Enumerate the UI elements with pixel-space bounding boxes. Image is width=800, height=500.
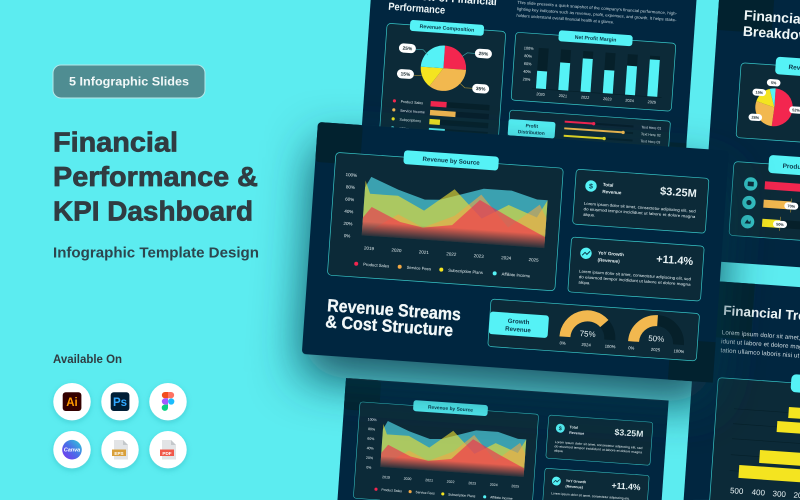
pill: trends <box>790 374 800 400</box>
icon: Adobe Photoshop: Ps <box>113 397 127 409</box>
panel: total revenue: aliqua. <box>554 449 564 453</box>
panel: total revenue: $ <box>559 426 562 432</box>
pie chart: 25% <box>478 51 489 58</box>
panel: yoy growth: YoY Growth <box>566 479 586 484</box>
axis labels: 100% <box>345 172 357 178</box>
legend: Subscription Plans <box>448 492 476 498</box>
legend: Subscription Plans <box>448 268 483 275</box>
axis labels: 2024 <box>501 255 512 261</box>
panel: revenue composition <box>379 18 506 146</box>
gauge: 2024: 2024 <box>581 342 592 348</box>
axis labels: 2025 <box>528 257 539 263</box>
slide: revenue streams (main) <box>302 122 729 383</box>
bar chart: net profit margin: 2023 <box>603 97 612 102</box>
axis labels: 20% <box>343 221 353 226</box>
axis labels: 2022 <box>446 251 457 257</box>
panel: total revenue <box>546 415 653 465</box>
panel: yoy growth: (Revenue) <box>565 484 584 490</box>
pill: growth revenue: Growth <box>507 318 530 326</box>
panel: total revenue: do eiusmod tempor incididunt ut labore et dolore magna <box>554 444 643 454</box>
legend and bars <box>391 98 490 137</box>
badge: 5 infographic slides: 5 Infographic Slides <box>69 74 189 88</box>
gauge: 2025: 2025 <box>651 347 661 352</box>
pie chart: 5% <box>771 81 777 85</box>
gauge: 2025: 50% <box>648 334 665 344</box>
panel: total revenue: Revenue <box>569 431 584 436</box>
bar chart: net profit margin: 80% <box>524 54 533 59</box>
bars: product rows <box>762 181 800 238</box>
pill: revenue composition: Revenue Composition <box>419 24 474 34</box>
legend: Service Fees <box>407 265 431 271</box>
gauge: 2024: 0% <box>559 340 566 346</box>
slide: financial overview (top) <box>359 0 698 183</box>
yoy growth label: (Revenue) <box>597 257 620 264</box>
panel: yoy growth: +11.4% <box>611 480 641 492</box>
legend and bars: Product Sales <box>401 100 423 105</box>
available on label: Available On <box>53 354 122 366</box>
legend: Service Fees <box>415 490 435 496</box>
pie chart: 25% <box>402 46 413 52</box>
yoy growth value: +11.4% <box>656 253 694 268</box>
progress lines: Text Here 03 <box>640 139 660 145</box>
axis labels: 0% <box>344 233 351 239</box>
axis labels: 2023 <box>474 253 484 259</box>
pill: growth revenue: Revenue <box>505 326 532 334</box>
panel: revenue by source chart <box>327 145 564 291</box>
legend <box>374 487 513 500</box>
panel: total revenue: Lorem ipsum dolor sit amet, consectetur adipiscing elit, sed <box>555 440 643 450</box>
gauge: 2024: 100% <box>605 344 616 349</box>
pie chart: 15% <box>755 91 764 95</box>
overview heading <box>388 0 497 20</box>
total revenue text: aliqua. <box>583 212 595 218</box>
axis labels: 2025 <box>511 484 519 489</box>
panel: growth revenue <box>488 299 700 361</box>
axis labels: 20% <box>366 456 373 460</box>
pie chart: 52% <box>792 108 800 113</box>
badge: 5 infographic slides <box>53 65 205 98</box>
panel: profit distribution <box>507 110 670 157</box>
axis labels: 80% <box>368 427 375 432</box>
axis labels <box>340 172 544 263</box>
axis labels: 80% <box>346 184 355 190</box>
icon: PDF file: PDF <box>162 451 172 456</box>
bar chart: net profit margin: 40% <box>523 70 532 74</box>
axis labels: 500 <box>730 486 744 496</box>
axis labels: 100% <box>368 417 377 422</box>
legend and bars: Affiliate <box>399 127 411 131</box>
total revenue text <box>583 201 697 225</box>
icon: Figma <box>149 383 187 420</box>
gauge: 2025: 100% <box>673 348 685 354</box>
pie chart <box>748 78 800 128</box>
bar chart: net profit margin: 2020 <box>536 92 545 97</box>
total revenue label <box>602 182 623 195</box>
slide title: Revenue Streams <box>327 295 462 324</box>
pill: product <box>768 155 800 181</box>
axis labels: 0% <box>366 465 372 470</box>
panel: total revenue <box>573 169 709 233</box>
panel: revenue pie <box>736 54 800 151</box>
total revenue label: Revenue <box>602 189 622 195</box>
icon: Canva: Canva <box>64 448 80 454</box>
area chart <box>379 421 528 479</box>
pill: revenue by source <box>403 150 499 171</box>
axis labels: 2021 <box>425 478 433 483</box>
subtitle: Infographic Template Design <box>53 246 259 262</box>
total revenue label: Total <box>603 182 614 188</box>
slide: financial breakdown (top right) <box>701 0 800 283</box>
bar chart: net profit margin: 60% <box>524 62 532 66</box>
yoy growth label <box>597 250 624 264</box>
gauge: 2025 <box>628 319 687 354</box>
main heading: Financial <box>53 126 178 158</box>
axis labels: 60% <box>345 196 354 202</box>
main heading: Performance & <box>53 161 258 192</box>
bars <box>729 403 800 483</box>
pie chart: 28% <box>751 116 760 120</box>
icon: Canva <box>53 431 91 468</box>
pill: net profit margin <box>558 30 633 46</box>
icon: Adobe Photoshop <box>101 383 139 420</box>
legend: Product Sales <box>381 488 402 493</box>
icon: EPS file <box>101 431 139 468</box>
panel: yoy growth <box>568 237 704 301</box>
gauge: 2025: 0% <box>628 345 635 351</box>
axis labels: 40% <box>344 209 354 214</box>
axis labels: 300 <box>772 489 787 499</box>
pill: revenue by source: Revenue by Source <box>428 405 473 414</box>
legend and bars: Service Income <box>400 109 425 114</box>
axis labels: 2020 <box>404 477 412 481</box>
area chart <box>360 176 550 250</box>
bar chart: net profit margin: 2022 <box>581 95 589 100</box>
icon: Adobe Illustrator <box>53 383 91 420</box>
panel: yoy growth <box>543 468 649 500</box>
icon: Adobe Illustrator: Ai <box>66 397 78 409</box>
panel: revenue by source chart <box>353 396 539 500</box>
legend <box>354 261 531 278</box>
axis labels: 2019 <box>382 475 390 480</box>
bar chart: net profit margin: 2021 <box>559 94 567 98</box>
axis labels: 400 <box>751 488 766 498</box>
axis labels: 2024 <box>490 483 498 487</box>
main heading: KPI Dashboard <box>53 196 253 226</box>
breakdown heading <box>742 7 800 44</box>
bar chart: net profit margin: 20% <box>523 77 531 82</box>
axis labels <box>730 486 800 500</box>
axis labels: 2019 <box>364 246 375 251</box>
trends paragraph <box>720 329 800 362</box>
bar chart: net profit margin: 2025 <box>647 100 656 105</box>
progress lines: Text Here 01 <box>641 125 661 131</box>
icon: row icons <box>740 177 758 229</box>
pill: profit distribution: Profit <box>525 123 539 130</box>
pill: revenue by source: Revenue by Source <box>422 156 481 167</box>
axis labels: 60% <box>367 437 375 441</box>
pie chart: 15% <box>400 71 411 78</box>
slide title: & Cost Structure <box>325 311 454 340</box>
gauge: 2024: 75% <box>579 329 596 339</box>
total revenue text: Lorem ipsum dolor sit amet, consectetur adipiscing elit, sed <box>584 201 696 214</box>
overview paragraph: holders understand overall financial health at a glance. <box>516 13 614 25</box>
bars: product rows: 70% <box>787 204 796 209</box>
pill: net profit margin: Net Profit Margin <box>574 35 617 44</box>
icon: dollar: $ <box>589 183 593 191</box>
pill: profit distribution <box>508 119 556 139</box>
pie chart <box>396 42 492 94</box>
panel: horizontal bar chart <box>710 369 800 500</box>
bar chart: net profit margin: 2024 <box>625 99 634 103</box>
axis labels: 40% <box>367 446 374 451</box>
gauge: 2024 <box>559 314 618 349</box>
slide: financial trends (bottom right) <box>684 280 800 500</box>
pie chart: 35% <box>476 86 486 93</box>
panel: product performance <box>729 152 800 249</box>
yoy growth text: aliqua. <box>578 280 590 285</box>
legend: Affiliate Income <box>501 271 531 278</box>
yoy growth text: do eiusmod tempor incididunt ut labore et dolore magna <box>579 274 692 287</box>
panel: net profit margin <box>511 27 676 111</box>
pill: revenue by source <box>413 400 488 416</box>
axis labels: 2020 <box>391 247 402 253</box>
axis labels: 2021 <box>419 249 430 255</box>
axis labels: 2023 <box>468 481 476 486</box>
overview paragraph: This slide presents a quick snapshot of the company's financial performance, high- <box>517 0 678 16</box>
progress lines: Text Here 02 <box>641 132 661 138</box>
yoy growth text <box>578 269 692 292</box>
pill: profit distribution: Distribution <box>518 129 545 137</box>
legend and bars: Subscriptions <box>399 118 421 123</box>
panel: total revenue: $3.25M <box>614 427 644 439</box>
main heading <box>53 126 258 226</box>
progress lines <box>564 120 661 145</box>
overview paragraph: lighting key indicators such as revenue, profit, expenses, and growth. It helps stake- <box>517 6 677 22</box>
yoy growth label: YoY Growth <box>598 250 624 257</box>
bars: product rows: 50% <box>776 223 785 227</box>
axis labels: 2022 <box>447 480 455 484</box>
bar chart: net profit margin <box>521 46 665 105</box>
yoy growth text: Lorem ipsum dolor sit amet, consectetur adipiscing elit, sed <box>579 269 691 281</box>
slide title <box>325 295 462 341</box>
icon: trend <box>580 247 592 259</box>
overview paragraph <box>516 0 678 29</box>
total revenue text: do eiusmod tempor incididunt ut labore et dolore magna <box>583 206 696 219</box>
icon: EPS file: EPS <box>114 451 124 456</box>
slide: revenue by source (bottom) <box>337 378 669 500</box>
pill: growth revenue <box>489 311 549 338</box>
bar chart: net profit margin: 100% <box>524 46 534 51</box>
pill: revenue <box>775 57 800 82</box>
icon: PDF file <box>149 431 187 468</box>
panel: total revenue: Total <box>569 425 578 430</box>
total revenue value: $3.25M <box>660 186 697 200</box>
axis labels <box>364 417 523 489</box>
legend: Product Sales <box>363 262 389 269</box>
overview heading: Performance <box>388 1 446 17</box>
